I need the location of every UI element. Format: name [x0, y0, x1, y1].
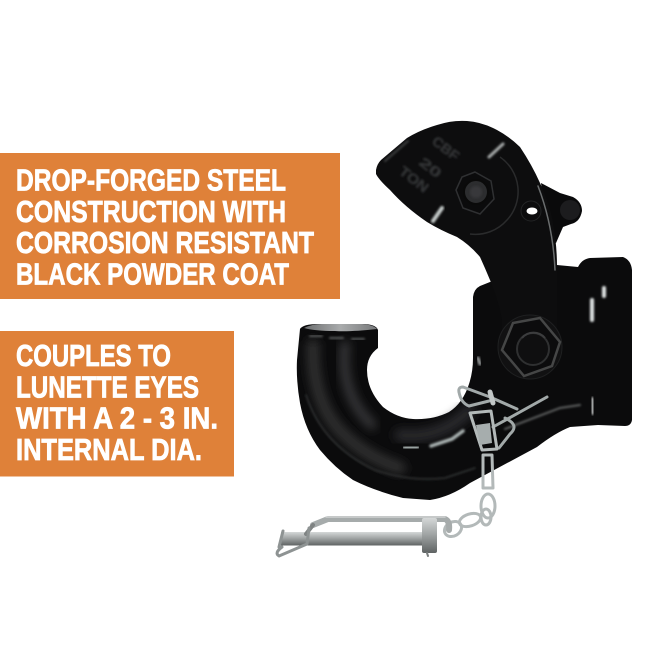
upper hex nut [456, 172, 494, 214]
text: steel construction description: CONSTRUCTION WITH [16, 194, 286, 229]
hook highlights [306, 336, 593, 479]
locking latch handle [541, 183, 582, 243]
casting text on latch: 20 [416, 154, 445, 181]
hook top face highlight [304, 324, 377, 331]
safety pin and chain [277, 387, 547, 556]
hook soft sheen [313, 275, 610, 468]
illustration: pintle hook [277, 121, 632, 556]
clip end loop [277, 528, 309, 556]
text: steel construction description [16, 163, 314, 291]
casting text on latch: TON [396, 163, 432, 196]
text: lunette eye description: COUPLES TO [16, 338, 171, 373]
text: steel construction description: CORROSION RESISTANT [16, 225, 314, 260]
chain links [442, 411, 497, 540]
latch plate [376, 121, 557, 340]
latch hole [521, 201, 541, 221]
hook body and mounting bracket [297, 257, 632, 500]
latch edge highlights [385, 141, 555, 270]
casting text on latch: CBF [429, 133, 463, 164]
panel: lunette eye callout [0, 331, 234, 476]
hitch pin shaft [281, 532, 433, 546]
pin collar [422, 518, 437, 553]
text: lunette eye description [16, 338, 218, 467]
text: steel construction description: BLACK POWDER COAT [16, 256, 289, 291]
lower bolt and nut [498, 315, 562, 379]
hitch pin upper clip bar [313, 519, 449, 530]
latch pivot ring [470, 157, 518, 234]
panel: steel construction callout [0, 153, 340, 299]
text: lunette eye description: INTERNAL DIA. [16, 432, 202, 467]
text: lunette eye description: LUNETTE EYES [16, 369, 199, 404]
spring clip on hook [459, 387, 547, 448]
text: lunette eye description: WITH A 2 - 3 IN. [16, 401, 218, 436]
casting text on latch [396, 133, 463, 196]
mounting plate edge [592, 288, 604, 320]
text: steel construction description: DROP-FORGED STEEL [16, 163, 286, 198]
